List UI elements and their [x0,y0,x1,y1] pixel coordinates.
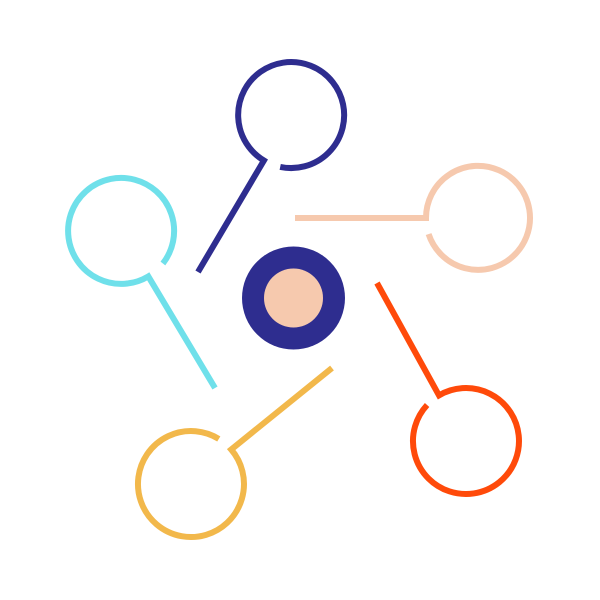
node: cyan [68,178,215,388]
node: dark blue [198,62,344,272]
center hub [242,246,345,350]
node: yellow [138,368,332,537]
node: peach [295,166,530,270]
node: orange [377,283,519,494]
